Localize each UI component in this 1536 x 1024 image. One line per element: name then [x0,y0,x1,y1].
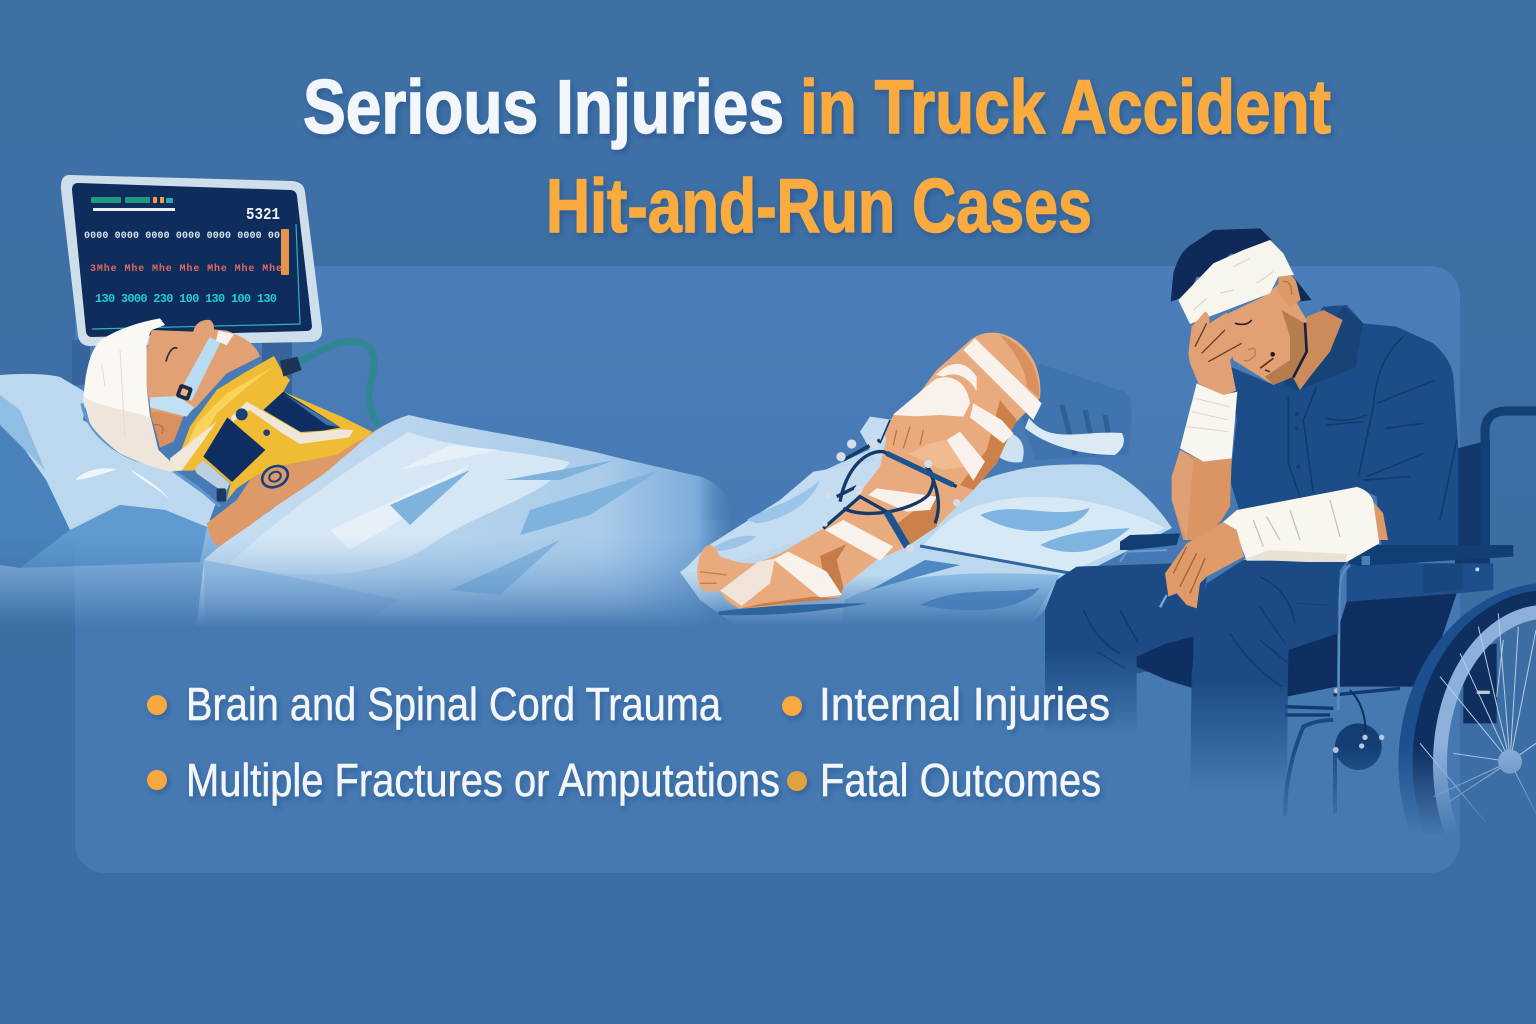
illustration: man in wheelchair [1045,228,1536,826]
collar [173,356,372,501]
hand on face [1188,312,1244,396]
leg detail [680,333,1042,615]
seat under legs [1137,637,1193,688]
wheelchair wheel and frame [1283,564,1536,826]
bed sheets [680,440,1172,625]
list of injuries [147,678,1110,806]
title [303,65,1331,249]
cast [1223,487,1379,562]
patient head, mask and neck collar [77,318,385,548]
icon: patient monitor: 5321 [246,206,280,225]
title: Serious Injuries [303,65,784,150]
panel: content card [75,266,1460,873]
wheelchair back and post [1455,411,1536,572]
wrist bandage [1180,383,1237,462]
loose sheet [680,417,893,574]
wheelchair seat back and left armrest [1120,533,1493,602]
trousers: far leg [1045,564,1207,721]
hand [884,415,960,453]
icon: oxygen tube [298,341,377,424]
collar badge [259,462,291,491]
illustration: patient in hospital bed [0,175,735,640]
chest [207,425,385,548]
bandage [83,318,180,472]
icon: patient monitor [61,175,322,400]
head bandage [1178,240,1294,324]
arm cast and right hand [1160,487,1513,608]
forearm [1172,450,1232,540]
hair [1171,228,1272,302]
trousers: near leg [1190,560,1346,772]
skin beyond cast [1363,490,1388,540]
bullet: multiple fractures or amputations: Multiple Fractures or Amputations [186,754,780,806]
bullet: internal injuries: Internal Injuries [819,678,1110,730]
external fixator [822,420,960,552]
title: in Truck Accident [800,65,1331,150]
shirt [1230,305,1458,563]
bullet: brain and spinal cord trauma: Brain and Spinal Cord Trauma [186,678,721,730]
leg shape [697,333,1040,609]
face [1225,280,1307,385]
bullet: fatal outcomes: Fatal Outcomes [820,754,1101,806]
icon: patient monitor: 130 3000 230 100 130 100 130 [95,292,277,306]
pillow and bed [0,374,684,618]
tube connector [280,357,302,377]
leg shadow on bed [718,603,867,615]
mask straps [177,337,221,401]
icon: patient monitor: 3Mhe Mhe Mhe Mhe Mhe Mhe Mhe [90,263,282,275]
back pillow [1015,364,1131,460]
illustration: bandaged leg with external fixator [680,333,1172,625]
bandage stripes [773,338,1042,597]
title: Hit-and-Run Cases [546,164,1092,249]
face [147,320,260,447]
pole [1338,565,1350,710]
leg shadows [960,400,1017,490]
ear [1278,275,1301,307]
man torso and head [1171,228,1458,563]
icon: patient monitor: 0000 0000 0000 0000 0000 0000 00 [84,231,280,242]
white bandage tail [1025,418,1124,455]
armrest [1345,545,1513,566]
neck [1293,310,1343,390]
pillow crease [82,403,220,507]
neck support [193,460,230,493]
hand [1165,522,1244,608]
blanket [198,415,721,622]
